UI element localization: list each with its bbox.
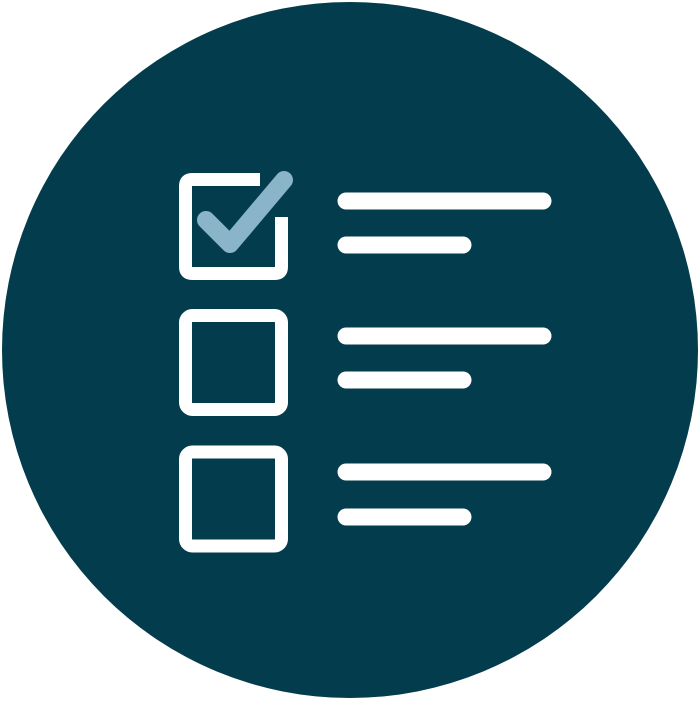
checkbox 2 — [186, 316, 282, 410]
text lines — [346, 201, 543, 517]
checkbox 1 (checked) — [186, 180, 282, 274]
checkbox 3 — [186, 452, 282, 546]
checkmark — [206, 180, 284, 244]
